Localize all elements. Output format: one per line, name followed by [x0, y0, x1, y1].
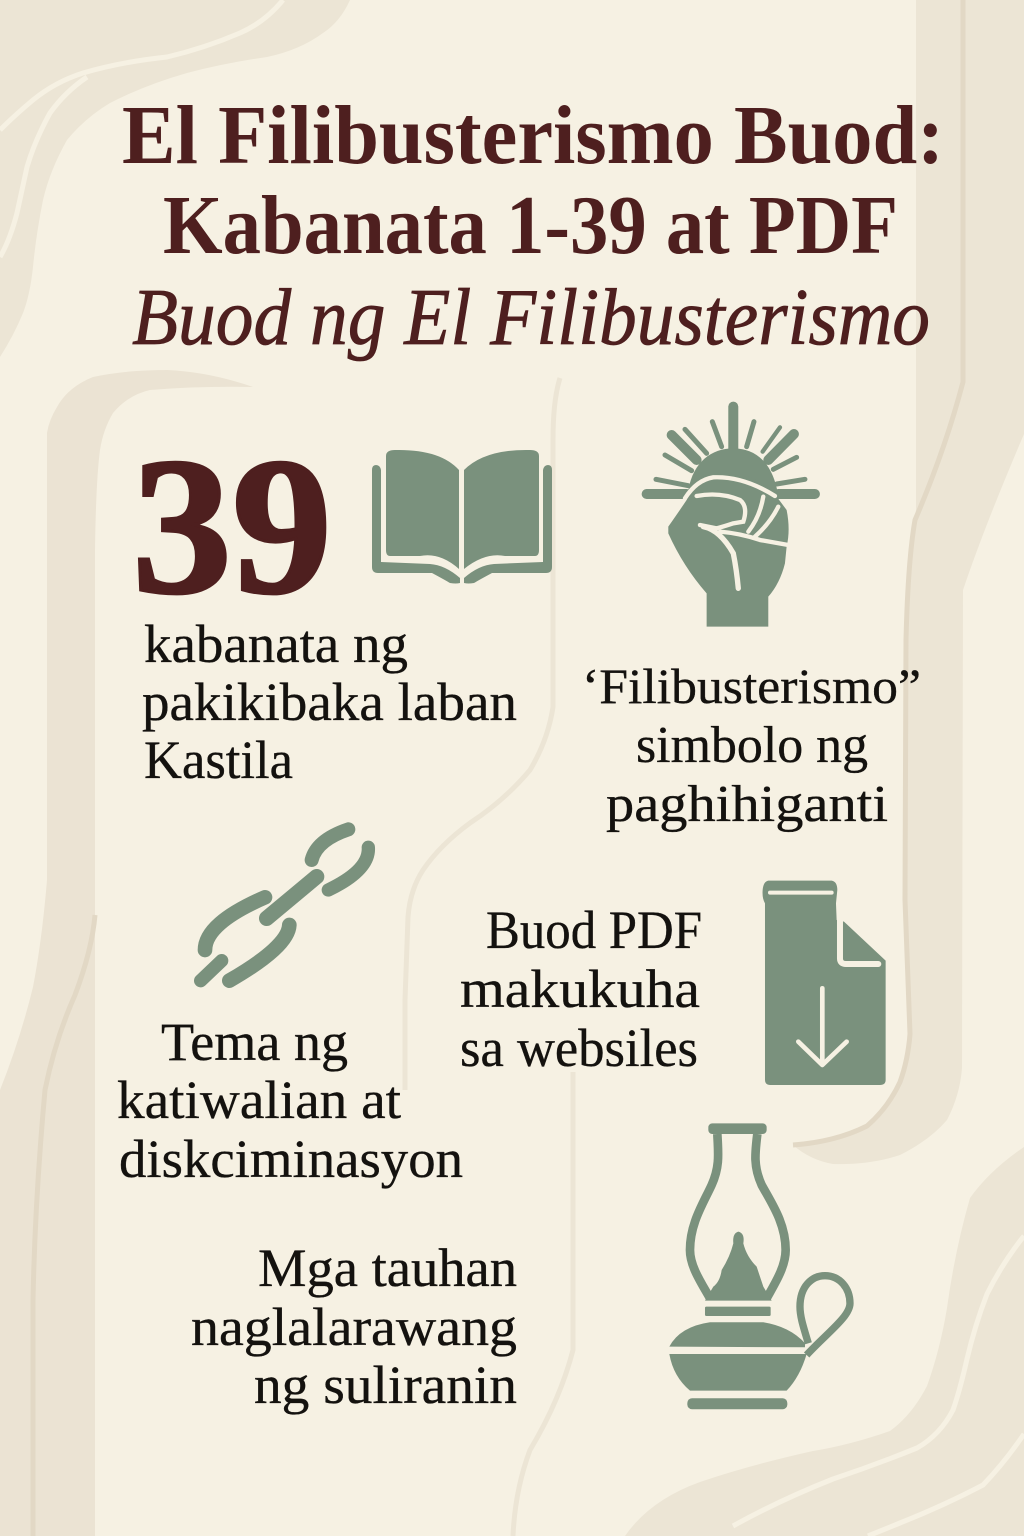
- text: tema: diskciminasyon: [119, 1129, 463, 1189]
- icon: raised fist with sun: [647, 407, 815, 627]
- text: Buod PDF: sa websiles: [460, 1018, 698, 1078]
- text: mga tauhan: ng suliranin: [254, 1355, 517, 1415]
- text: kabanata: pakikibaka laban: [142, 672, 517, 732]
- icon: broken chain: [201, 829, 368, 981]
- text: tema: Tema ng: [161, 1012, 348, 1072]
- icon: oil lamp: [669, 1123, 850, 1409]
- text: tema: katiwalian at: [117, 1070, 401, 1130]
- icon: PDF download document: [763, 881, 886, 1085]
- text: Buod PDF: [460, 900, 702, 1078]
- title block: [122, 89, 944, 362]
- title line 2: Kabanata 1-39 at PDF: [163, 179, 898, 272]
- big number 39: 39: [132, 418, 332, 635]
- text: tema: [117, 1012, 463, 1189]
- text: Filibusterismo symbol: [582, 658, 921, 833]
- text: mga tauhan: naglalarawang: [191, 1297, 517, 1357]
- text: Filibusterismo symbol: simbolo ng: [636, 717, 868, 774]
- text: Buod PDF: Buod PDF: [486, 900, 702, 960]
- text: mga tauhan: Mga tauhan: [258, 1238, 517, 1298]
- icon: open book: [372, 450, 552, 584]
- text: kabanata: Kastila: [144, 730, 293, 790]
- text: Filibusterismo symbol: ‘Filibusterismo”: [582, 658, 921, 714]
- text: mga tauhan: [191, 1238, 517, 1415]
- text: kabanata: [142, 614, 517, 790]
- text: Filibusterismo symbol: paghihiganti: [606, 776, 888, 833]
- title line 1: El Filibusterismo Buod:: [122, 89, 944, 182]
- text: kabanata: kabanata ng: [144, 614, 408, 674]
- text: Buod PDF: makukuha: [460, 959, 700, 1019]
- subtitle: Buod ng El Filibusterismo: [132, 274, 930, 362]
